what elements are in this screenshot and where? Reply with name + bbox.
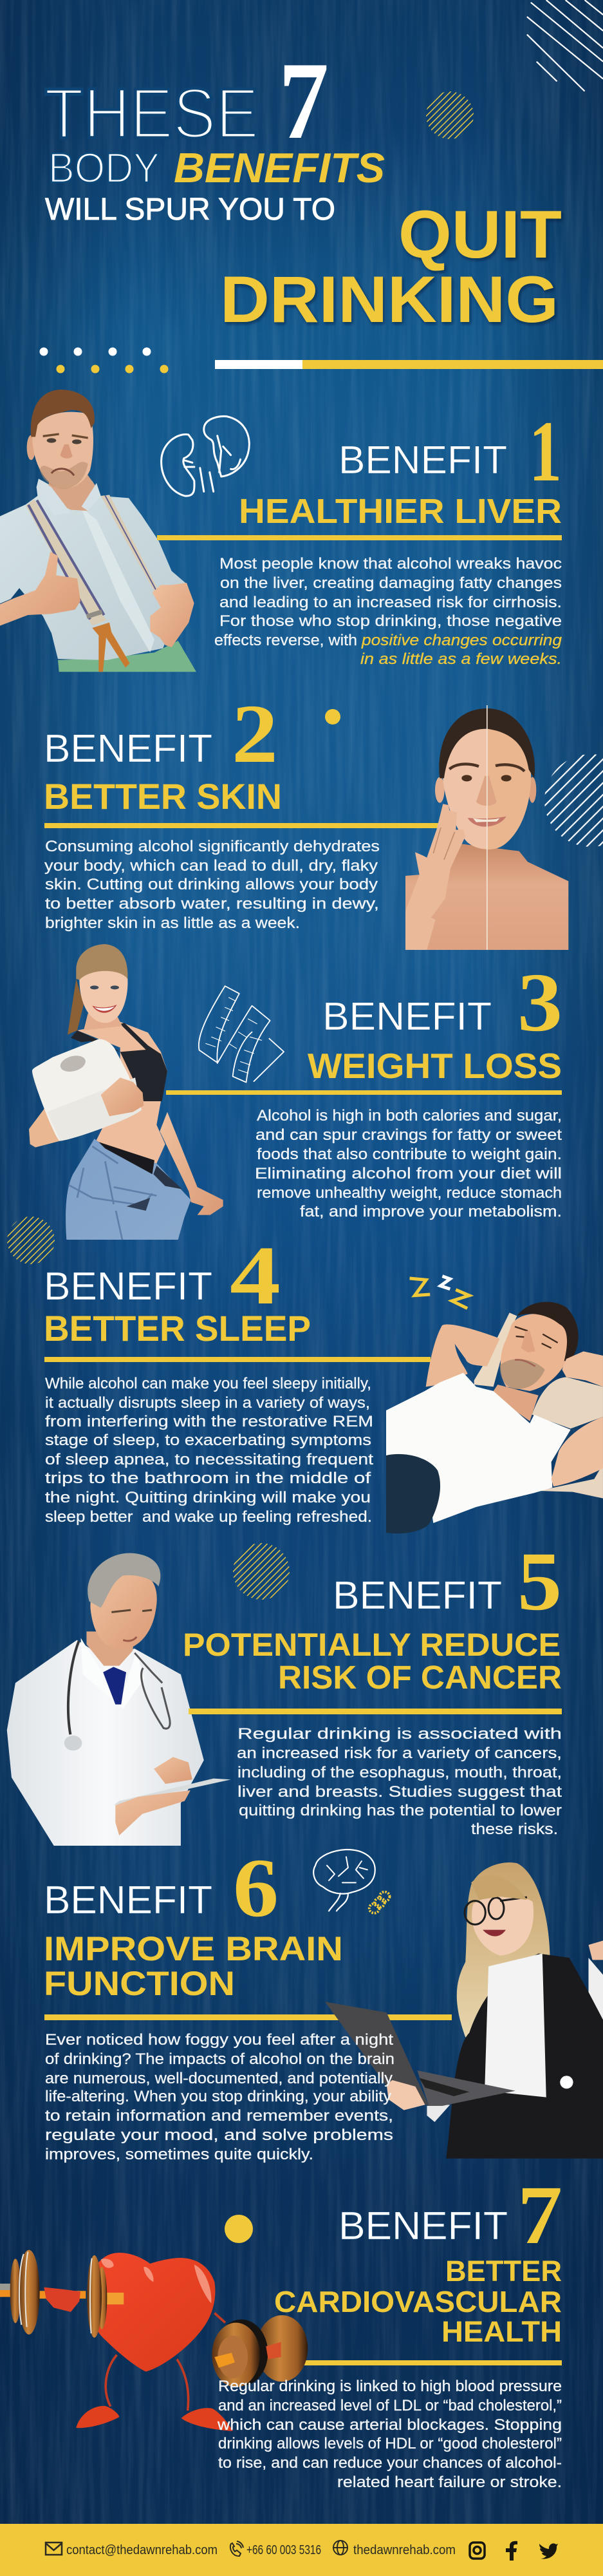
body text: benefit 6: to retain information and remember events,	[45, 2107, 393, 2125]
email address: contact@thedawnrehab.com	[66, 2543, 218, 2557]
panel: benefit 1	[0, 390, 562, 672]
body text: benefit 4: stage of sleep, to exacerbating symptoms	[45, 1432, 371, 1449]
icon: instagram	[470, 2543, 485, 2559]
subheading: healthier liver: HEALTHIER LIVER	[239, 492, 562, 531]
subheading: improve brain function: FUNCTION	[44, 1965, 235, 2003]
body text: benefit 7: related heart failure or stroke.	[337, 2474, 562, 2491]
heading: benefit 7: BENEFIT	[339, 2204, 508, 2248]
body text: benefit 6: improves, sometimes quite quickly.	[45, 2146, 313, 2163]
body text: benefit 3: fat, and improve your metabolism.	[300, 1203, 562, 1220]
icon: brain	[313, 1850, 375, 1911]
subheading: better cardiovascular health	[274, 2255, 562, 2348]
title line: quit drinking	[220, 197, 562, 336]
panel: benefit 2	[44, 688, 568, 950]
heading: benefit 1	[339, 404, 562, 500]
heading: benefit 7: 7	[517, 2169, 562, 2262]
body text: benefit 1: For those who stop drinking, those negative	[219, 612, 562, 630]
panel: benefit 3	[29, 944, 562, 1240]
body text: benefit 3: and can spur cravings for fatty or sweet	[255, 1126, 562, 1144]
body text: benefit 2: Consuming alcohol significantly dehydrates	[45, 838, 380, 855]
body text: benefit 4: from interfering with the restorative REM	[45, 1413, 373, 1430]
body text: benefit 4: While alcohol can make you feel sleepy initially,	[45, 1375, 371, 1392]
body text: benefit 5: Regular drinking is associated with	[237, 1725, 562, 1743]
heading: benefit 3	[322, 956, 562, 1049]
body text: benefit 6: life-altering. When you stop drinking, your ability	[45, 2088, 391, 2105]
title line: these 7: THESE	[44, 74, 259, 153]
icon: twitter	[539, 2543, 558, 2559]
decorative hatched circle	[233, 1543, 290, 1600]
body text: benefit 6: are numerous, well-documented, and potentially	[45, 2070, 393, 2087]
body text: benefit 1: and leading to an increased risk for cirrhosis.	[219, 594, 562, 611]
icon: email	[46, 2543, 62, 2555]
body text: benefit 6: Ever noticed how foggy you feel after a night	[45, 2031, 393, 2049]
subheading: potentially reduce risk of cancer: RISK OF CANCER	[278, 1659, 562, 1696]
photo: man touching face	[405, 705, 568, 950]
heading: benefit 4: BENEFIT	[44, 1264, 212, 1308]
body text: benefit 2: brighter skin in as little as a week.	[45, 914, 300, 932]
icon: gears	[369, 1892, 389, 1913]
icon: phone	[230, 2541, 243, 2556]
body text: benefit 7: Regular drinking is linked to high blood pressure	[218, 2378, 562, 2395]
body text: benefit 5: an increased risk for a variety of cancers,	[237, 1745, 562, 1762]
heading: benefit 2: BENEFIT	[44, 726, 212, 770]
body text: benefit 7	[217, 2378, 562, 2491]
body text: benefit 1: in as little as a few weeks.	[360, 650, 562, 668]
icon: kidneys	[162, 416, 249, 496]
title	[44, 40, 562, 336]
subheading: potentially reduce risk of cancer: POTENTIALLY REDUCE	[183, 1627, 561, 1663]
body text: benefit 2	[44, 838, 380, 932]
icon: measuring tape	[199, 986, 284, 1083]
body text: benefit 3: Alcohol is high in both calories and sugar,	[257, 1107, 562, 1124]
heading: benefit 4	[44, 1229, 281, 1322]
subheading: improve brain function	[44, 1930, 343, 2003]
website: thedawnrehab.com	[353, 2543, 456, 2557]
body text: benefit 7: to rise, and can reduce your chances of alcohol-	[218, 2454, 562, 2472]
subheading: weight loss: WEIGHT LOSS	[308, 1046, 562, 1086]
title line: body benefits	[48, 144, 385, 191]
decorative hatched circle	[7, 1217, 55, 1264]
icon: zzz	[410, 1276, 469, 1309]
title line: these 7	[44, 40, 329, 162]
body text: benefit 1: positive changes occurring	[361, 632, 562, 649]
photo: woman holding scale	[29, 944, 223, 1240]
body text: benefit 3: foods that also contribute to weight gain.	[257, 1146, 562, 1163]
body text: benefit 6: of drinking? The impacts of alcohol on the brain	[45, 2050, 394, 2068]
body text: benefit 7: and an increased level of LDL or “bad cholesterol,”	[218, 2397, 562, 2414]
title line: body benefits: BENEFITS	[174, 144, 385, 191]
body text: benefit 5: quitting drinking has the potential to lower	[239, 1802, 562, 1819]
illustration: heart lifting dumbbells	[0, 2250, 308, 2431]
body text: benefit 3: remove unhealthy weight, reduce stomach	[257, 1184, 562, 1202]
heading: benefit 5: BENEFIT	[333, 1573, 502, 1617]
body text: benefit 3: Eliminating alcohol from your diet will	[255, 1165, 562, 1182]
heading: benefit 1: BENEFIT	[339, 438, 507, 482]
heading: benefit 5: 5	[517, 1535, 562, 1628]
body text: benefit 5: these risks.	[471, 1821, 558, 1838]
decorative dots	[40, 348, 169, 374]
photo: woman with laptop	[325, 1862, 603, 2159]
subheading: improve brain function: IMPROVE BRAIN	[44, 1930, 343, 1968]
body text: benefit 2: your body, which can lead to dull, dry, flaky	[44, 857, 378, 875]
heading: benefit 1: 1	[529, 404, 562, 500]
title line: these 7: 7	[279, 40, 329, 162]
decorative white hatched circle	[544, 754, 603, 847]
heading: benefit 3: BENEFIT	[322, 994, 492, 1038]
body text: benefit 4: the night. Quitting drinking will make you	[45, 1489, 371, 1506]
heading: benefit 6	[44, 1842, 279, 1935]
title line: quit drinking: QUIT	[398, 197, 562, 272]
body text: benefit 6: regulate your mood, and solve problems	[45, 2126, 393, 2144]
body text: benefit 5: liver and breasts. Studies suggest that	[237, 1783, 562, 1801]
heading: benefit 5	[333, 1535, 562, 1628]
icon: globe	[333, 2541, 348, 2555]
body text: benefit 4: sleep better and wake up feeling refreshed.	[45, 1508, 372, 1526]
body text: benefit 2: skin. Cutting out drinking allows your body	[45, 876, 378, 893]
heading: benefit 2: 2	[232, 688, 278, 781]
body text: benefit 4	[45, 1375, 373, 1526]
subheading: better cardiovascular health: BETTER	[445, 2255, 562, 2287]
panel: benefit 6	[44, 1842, 603, 2163]
subheading: better skin: BETTER SKIN	[44, 776, 282, 817]
body text: benefit 7: which can cause arterial blockages. Stopping	[217, 2416, 562, 2434]
heading: benefit 7	[339, 2169, 562, 2262]
heading: benefit 4: 4	[230, 1229, 281, 1322]
body text: benefit 1: on the liver, creating damaging fatty changes	[220, 574, 562, 592]
subheading: better cardiovascular health: HEALTH	[441, 2315, 562, 2348]
body text: benefit 5	[237, 1725, 562, 1838]
subheading: better cardiovascular health: CARDIOVASCULAR	[274, 2285, 562, 2318]
phone number: +66 60 003 5316	[246, 2543, 321, 2557]
body text: benefit 4: of sleep apnea, to necessitating frequent	[45, 1451, 373, 1468]
photo: doctor with clipboard	[7, 1553, 231, 1846]
decorative dot	[325, 709, 340, 724]
decorative dot	[225, 2215, 253, 2243]
panel: benefit 4	[44, 1229, 603, 1533]
body text: benefit 3	[255, 1107, 562, 1220]
body text: benefit 5: including of the esophagus, mouth, throat,	[237, 1764, 562, 1781]
panel: benefit 5	[7, 1535, 562, 1846]
subheading: potentially reduce risk of cancer	[183, 1627, 562, 1696]
body text: benefit 2: to better absorb water, resulting in dewy,	[45, 895, 379, 913]
rule: benefit 6	[44, 2014, 452, 2020]
body text: benefit 4: it actually disrupts sleep in a variety of ways,	[45, 1394, 370, 1412]
photo: sleeping man	[386, 1302, 603, 1533]
photo: man with belly	[0, 390, 196, 672]
heading: benefit 3: 3	[517, 956, 562, 1049]
title line: quit drinking: DRINKING	[220, 263, 559, 336]
body text: benefit 1	[214, 555, 562, 668]
title line: will spur you to: WILL SPUR YOU TO	[45, 193, 335, 227]
subheading: better sleep: BETTER SLEEP	[44, 1308, 311, 1349]
body text: benefit 1: effects reverse, with	[214, 632, 357, 649]
footer	[0, 2524, 603, 2576]
heading: benefit 6: 6	[233, 1842, 279, 1935]
decorative hatched circle	[426, 91, 474, 139]
title rule	[215, 360, 603, 369]
body text: benefit 1: Most people know that alcohol wreaks havoc	[219, 555, 562, 573]
heading: benefit 2	[44, 688, 278, 781]
decorative stripes top right	[527, 0, 603, 91]
body text: benefit 6	[45, 2031, 394, 2163]
panel: benefit 7	[0, 2169, 562, 2491]
body text: benefit 7: drinking allows levels of HDL or “good cholesterol”	[218, 2435, 562, 2452]
title line: body benefits: BODY	[48, 144, 160, 191]
heading: benefit 6: BENEFIT	[44, 1878, 212, 1922]
icon: facebook	[506, 2541, 517, 2561]
body text: benefit 4: trips to the bathroom in the middle of	[45, 1470, 371, 1487]
rule: benefit 7	[302, 2360, 562, 2365]
